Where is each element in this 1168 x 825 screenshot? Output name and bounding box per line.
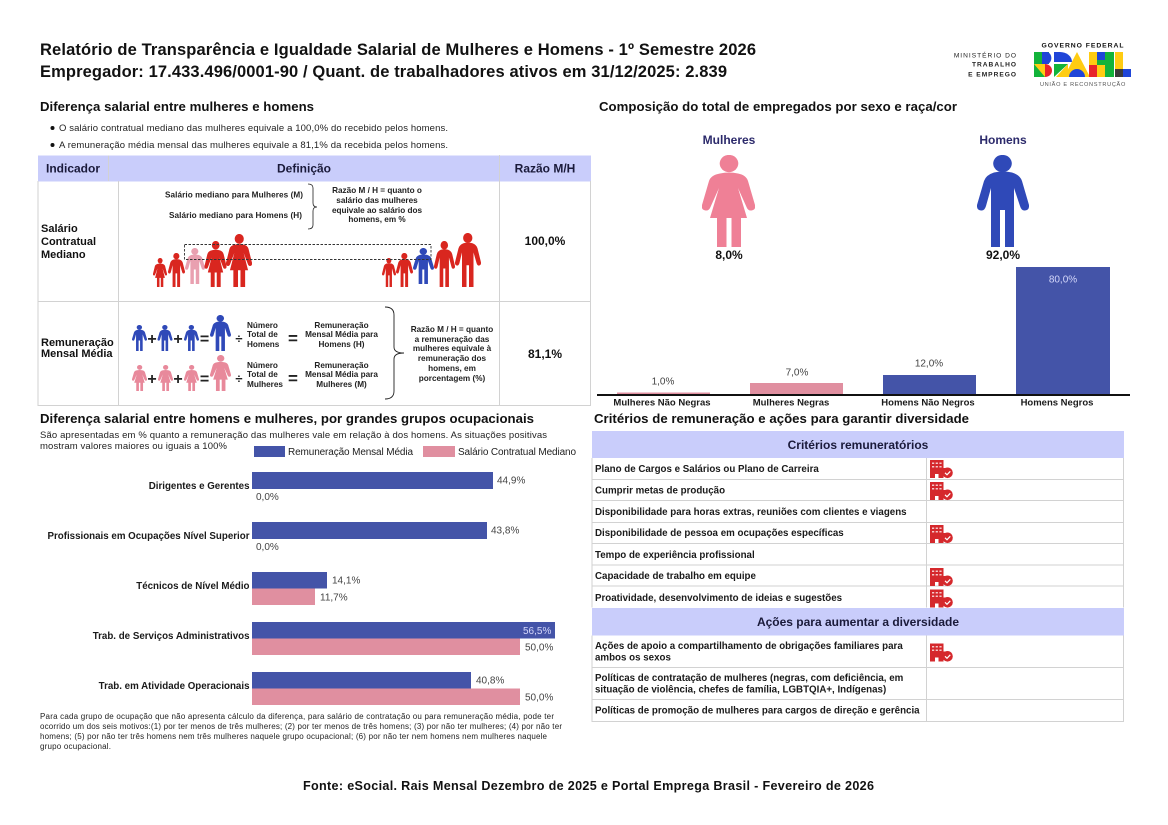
bar chart: grupos ocupacionais: 43,8% xyxy=(491,526,519,536)
logo: ministério do trabalho e emprego: MINISTÉRIO DO xyxy=(954,50,1017,60)
definition text: Salário mediano para Homens (H) xyxy=(169,211,302,220)
heading: Diferença salarial entre mulheres e homens xyxy=(40,99,314,114)
ratio explanation xyxy=(385,307,493,399)
bar chart: grupos ocupacionais: 0,0% xyxy=(256,542,279,553)
bar chart: grupos ocupacionais: 40,8% xyxy=(476,676,504,686)
logo: ministério do trabalho e emprego xyxy=(954,50,1017,78)
formula: women: Mulheres xyxy=(247,380,283,389)
ratio explanation: homens, em xyxy=(428,364,476,373)
bar chart: composição xyxy=(597,267,1130,408)
logo: governo federal brasil xyxy=(1034,42,1131,88)
panel: composição por sexo e raça/cor xyxy=(597,99,1130,408)
icon: women line-up xyxy=(153,234,252,287)
row: remuneração mensal média xyxy=(41,307,562,399)
formula: men: ÷ xyxy=(235,331,243,346)
footnote: grupo ocupacional. xyxy=(40,742,111,751)
bar chart: composição: Mulheres Não Negras xyxy=(613,398,711,408)
footnote xyxy=(40,712,562,751)
source line: Fonte: eSocial. Rais Mensal Dezembro de 2025 e Portal Emprega Brasil - Fevereiro de 2026 xyxy=(303,779,874,793)
bar chart: grupos ocupacionais: 50,0% xyxy=(525,692,553,704)
ratio explanation: a remuneração das xyxy=(415,335,490,344)
bullet summary: O salário contratual mediano das mulheres equivale a 100,0% do recebido pelos homens. xyxy=(59,123,448,134)
bar chart: grupos ocupacionais: 56,5% xyxy=(523,626,551,637)
bar chart: grupos ocupacionais: Profissionais em Ocupações Nível Superior xyxy=(48,531,250,542)
table: critérios remuneratórios: Tempo de experiência profissional xyxy=(595,550,755,561)
row: salário contratual mediano xyxy=(41,184,566,287)
formula: women: = xyxy=(288,369,298,388)
heading: Diferença salarial entre homens e mulheres, por grandes grupos ocupacionais xyxy=(40,411,534,426)
table header xyxy=(38,156,591,182)
report title: Empregador: 17.433.496/0001-90 / Quant. de trabalhadores ativos em 31/12/2025: 2.839 xyxy=(40,63,727,81)
formula: women: Remuneração xyxy=(314,361,369,370)
panel: diferença por grupos ocupacionais xyxy=(40,411,576,751)
table header: Indicador xyxy=(46,162,100,176)
table: ações para aumentar a diversidade xyxy=(592,608,1124,722)
row label xyxy=(41,337,114,360)
formula: men: Total de xyxy=(247,330,278,339)
bar chart: grupos ocupacionais: 44,9% xyxy=(497,476,525,486)
bar chart: composição: Homens Negros xyxy=(1021,398,1093,408)
logo: governo federal brasil: UNIÃO E RECONSTRUÇÃO xyxy=(1040,81,1126,88)
definition text: Razão M / H = quanto o xyxy=(332,186,422,195)
bar chart: grupos ocupacionais: 14,1% xyxy=(332,576,360,586)
table: ações para aumentar a diversidade: Políticas de contratação de mulheres (negras, com deficiência, em xyxy=(595,673,904,684)
ratio explanation: remuneração dos xyxy=(418,354,487,363)
table: critérios remuneratórios: Proatividade, desenvolvimento de ideias e sugestões xyxy=(595,593,843,604)
formula: women xyxy=(132,355,378,391)
bar chart: grupos ocupacionais: 50,0% xyxy=(525,642,553,654)
bar chart: grupos ocupacionais: 11,7% xyxy=(320,592,348,604)
definition text: homens, em % xyxy=(348,215,406,224)
footnote: ocorrido um dos seis motivos:(1) por ter menos de três mulheres; (2) por ter menos de três homens; (3) por não ter mulheres; (4) por não ter xyxy=(40,722,562,731)
formula: men: Número xyxy=(247,321,278,330)
panel: critérios de remuneração e ações xyxy=(592,411,1124,722)
table: critérios remuneratórios: Critérios remuneratórios xyxy=(788,438,929,452)
description: São apresentadas em % quanto a remuneração das mulheres vale em relação à dos homens. As situações positivas xyxy=(40,430,547,441)
row label: Salário xyxy=(41,223,78,235)
row label: Mensal Média xyxy=(41,348,113,360)
value: 81,1% xyxy=(528,347,562,361)
heading: Composição do total de empregados por sexo e raça/cor xyxy=(599,99,957,114)
figure: mulheres 8,0%: 8,0% xyxy=(715,248,743,262)
table: critérios remuneratórios xyxy=(592,431,1124,608)
definition text xyxy=(165,184,422,229)
figure: homens 92,0%: Homens xyxy=(979,133,1027,147)
bar chart: composição: 7,0% xyxy=(786,368,809,378)
logo: ministério do trabalho e emprego: E EMPREGO xyxy=(968,72,1017,78)
table: critérios remuneratórios: Capacidade de trabalho em equipe xyxy=(595,571,756,582)
formula: men: = xyxy=(200,331,209,348)
report title xyxy=(40,41,756,81)
bar chart: grupos ocupacionais xyxy=(48,472,555,705)
bar chart: composição: Mulheres Negras xyxy=(753,398,829,408)
bar chart: grupos ocupacionais: Trab. de Serviços Administrativos xyxy=(93,631,250,642)
logo: governo federal brasil: GOVERNO FEDERAL xyxy=(1042,42,1124,50)
figure: mulheres 8,0% xyxy=(702,133,756,262)
row label: Remuneração xyxy=(41,337,114,349)
table: ações para aumentar a diversidade: Políticas de promoção de mulheres para cargos de direção e gerência xyxy=(595,706,920,716)
table: critérios remuneratórios: Plano de Cargos e Salários ou Plano de Carreira xyxy=(595,464,819,475)
bar chart: composição: 12,0% xyxy=(915,358,943,370)
report title: Relatório de Transparência e Igualdade Salarial de Mulheres e Homens - 1º Semestre 2026 xyxy=(40,41,756,59)
bar chart: composição: 1,0% xyxy=(652,376,675,388)
legend: Remuneração Mensal Média xyxy=(288,447,413,458)
bar chart: grupos ocupacionais: Técnicos de Nível Médio xyxy=(136,581,250,592)
table: critérios remuneratórios: Disponibilidade de pessoa em ocupações específicas xyxy=(595,528,844,539)
formula: men: Homens (H) xyxy=(319,340,365,349)
bar chart: grupos ocupacionais: Trab. em Atividade Operacionais xyxy=(99,681,250,692)
table header: Definição xyxy=(277,162,331,176)
ratio explanation: porcentagem (%) xyxy=(419,374,485,383)
bar chart: grupos ocupacionais: Dirigentes e Gerentes xyxy=(149,481,250,492)
formula: women: = xyxy=(200,371,209,388)
value: 100,0% xyxy=(525,234,566,248)
definition text: salário das mulheres xyxy=(336,196,418,205)
ratio explanation: Razão M / H = quanto xyxy=(411,325,493,334)
bar chart: grupos ocupacionais: 0,0% xyxy=(256,492,279,503)
bar chart: composição: 80,0% xyxy=(1049,274,1077,286)
panel: diferença salarial entre mulheres e homens xyxy=(38,99,591,406)
legend xyxy=(254,446,576,458)
figure: mulheres 8,0%: Mulheres xyxy=(703,133,756,147)
formula: men xyxy=(132,315,378,351)
footnote: homens; (5) por não ter três homens nem três mulheres naquele grupo ocupacional; (6) por não ter nem homens nem mulheres naquele xyxy=(40,732,548,741)
row label xyxy=(41,223,96,261)
ratio explanation: mulheres equivale à xyxy=(413,344,492,353)
formula: women: ÷ xyxy=(235,371,243,386)
bullet summary xyxy=(50,123,448,151)
formula: women: + xyxy=(147,371,157,388)
table: critérios remuneratórios: Cumprir metas de produção xyxy=(595,486,725,496)
definition text: Salário mediano para Mulheres (M) xyxy=(165,190,303,200)
table: ações para aumentar a diversidade: situação de violência, chefes de família, LGBTQIA+, Indígenas) xyxy=(595,684,886,696)
definition text: equivale ao salário dos xyxy=(332,206,422,215)
description: mostram valores maiores ou iguais a 100% xyxy=(40,441,228,452)
bar chart: composição: Homens Não Negros xyxy=(881,398,975,408)
formula: women: Total de xyxy=(247,370,278,379)
bullet summary: A remuneração média mensal das mulheres equivale a 81,1% da recebida pelos homens. xyxy=(59,140,448,151)
formula: men: Remuneração xyxy=(314,321,369,330)
table: ações para aumentar a diversidade: Ações de apoio a compartilhamento de obrigações familiares para xyxy=(595,641,903,652)
logo: ministério do trabalho e emprego: TRABALHO xyxy=(972,62,1017,68)
formula: men: = xyxy=(288,329,298,348)
heading: Critérios de remuneração e ações para garantir diversidade xyxy=(594,411,969,426)
figure: homens 92,0%: 92,0% xyxy=(986,248,1020,262)
formula: men: + xyxy=(147,331,157,348)
formula: women: Número xyxy=(247,361,278,370)
row label: Mediano xyxy=(41,249,86,261)
table: ações para aumentar a diversidade: Ações para aumentar a diversidade xyxy=(757,615,959,629)
formula: women: Mensal Média para xyxy=(305,370,378,379)
formula: men: + xyxy=(173,331,183,348)
figure: homens 92,0% xyxy=(977,133,1029,262)
row label: Contratual xyxy=(41,236,96,248)
table header: Razão M/H xyxy=(515,162,575,176)
formula: men: Mensal Média para xyxy=(305,330,378,339)
icon: men line-up xyxy=(382,233,481,287)
footnote: Para cada grupo de ocupação que não apresenta cálculo da diferença, para salário de contratação ou para remuneração média, pode ter xyxy=(40,712,554,721)
formula: women: Mulheres (M) xyxy=(316,380,367,389)
formula: men: Homens xyxy=(247,340,280,349)
legend: Salário Contratual Mediano xyxy=(458,447,576,458)
description xyxy=(40,430,547,452)
formula: women: + xyxy=(173,371,183,388)
table: critérios remuneratórios: Disponibilidade para horas extras, reuniões com clientes e viagens xyxy=(595,507,907,518)
table: ações para aumentar a diversidade: ambos os sexos xyxy=(595,652,671,664)
